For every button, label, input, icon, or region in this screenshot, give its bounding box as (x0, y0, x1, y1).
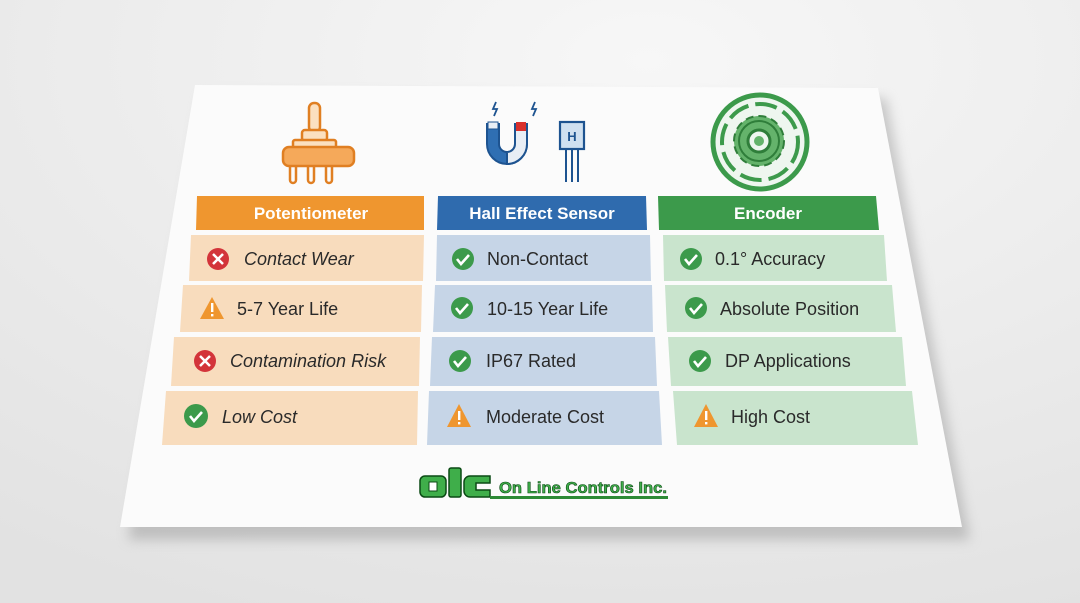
logo: On Line Controls Inc.: On Line Controls Inc. (499, 480, 667, 497)
encoder items: DP Applications (725, 351, 851, 371)
hall items (447, 248, 608, 427)
encoder items: Absolute Position (720, 299, 859, 319)
icon: potentiometer (283, 103, 354, 183)
encoder items: High Cost (731, 407, 810, 427)
potentiometer items: Low Cost (222, 407, 298, 427)
encoder items: 0.1° Accuracy (715, 249, 825, 269)
header: Potentiometer: Potentiometer (254, 204, 369, 223)
icon: hall effect magnet and sensor: H (567, 129, 577, 144)
header: Encoder: Encoder (734, 204, 802, 223)
potentiometer items: Contact Wear (244, 249, 355, 269)
panel: potentiometer rows (162, 235, 424, 445)
icon: hall effect magnet and sensor (487, 102, 584, 182)
potentiometer items: Contamination Risk (230, 351, 387, 371)
panel: hall rows (427, 235, 662, 445)
card (120, 85, 970, 540)
header: Potentiometer (196, 196, 424, 230)
hall items: Moderate Cost (486, 407, 604, 427)
potentiometer items: 5-7 Year Life (237, 299, 338, 319)
header: Hall Effect Sensor: Hall Effect Sensor (469, 204, 615, 223)
potentiometer items (184, 248, 387, 428)
icon: encoder (713, 95, 807, 189)
hall items: Non-Contact (487, 249, 588, 269)
row texts (184, 248, 859, 428)
header: Hall Effect Sensor (437, 196, 647, 230)
hall items: 10-15 Year Life (487, 299, 608, 319)
encoder items (680, 248, 859, 427)
panel: encoder rows (663, 235, 918, 445)
header: Encoder (658, 196, 879, 230)
logo: On Line Controls Inc. (420, 468, 668, 499)
hall items: IP67 Rated (486, 351, 576, 371)
